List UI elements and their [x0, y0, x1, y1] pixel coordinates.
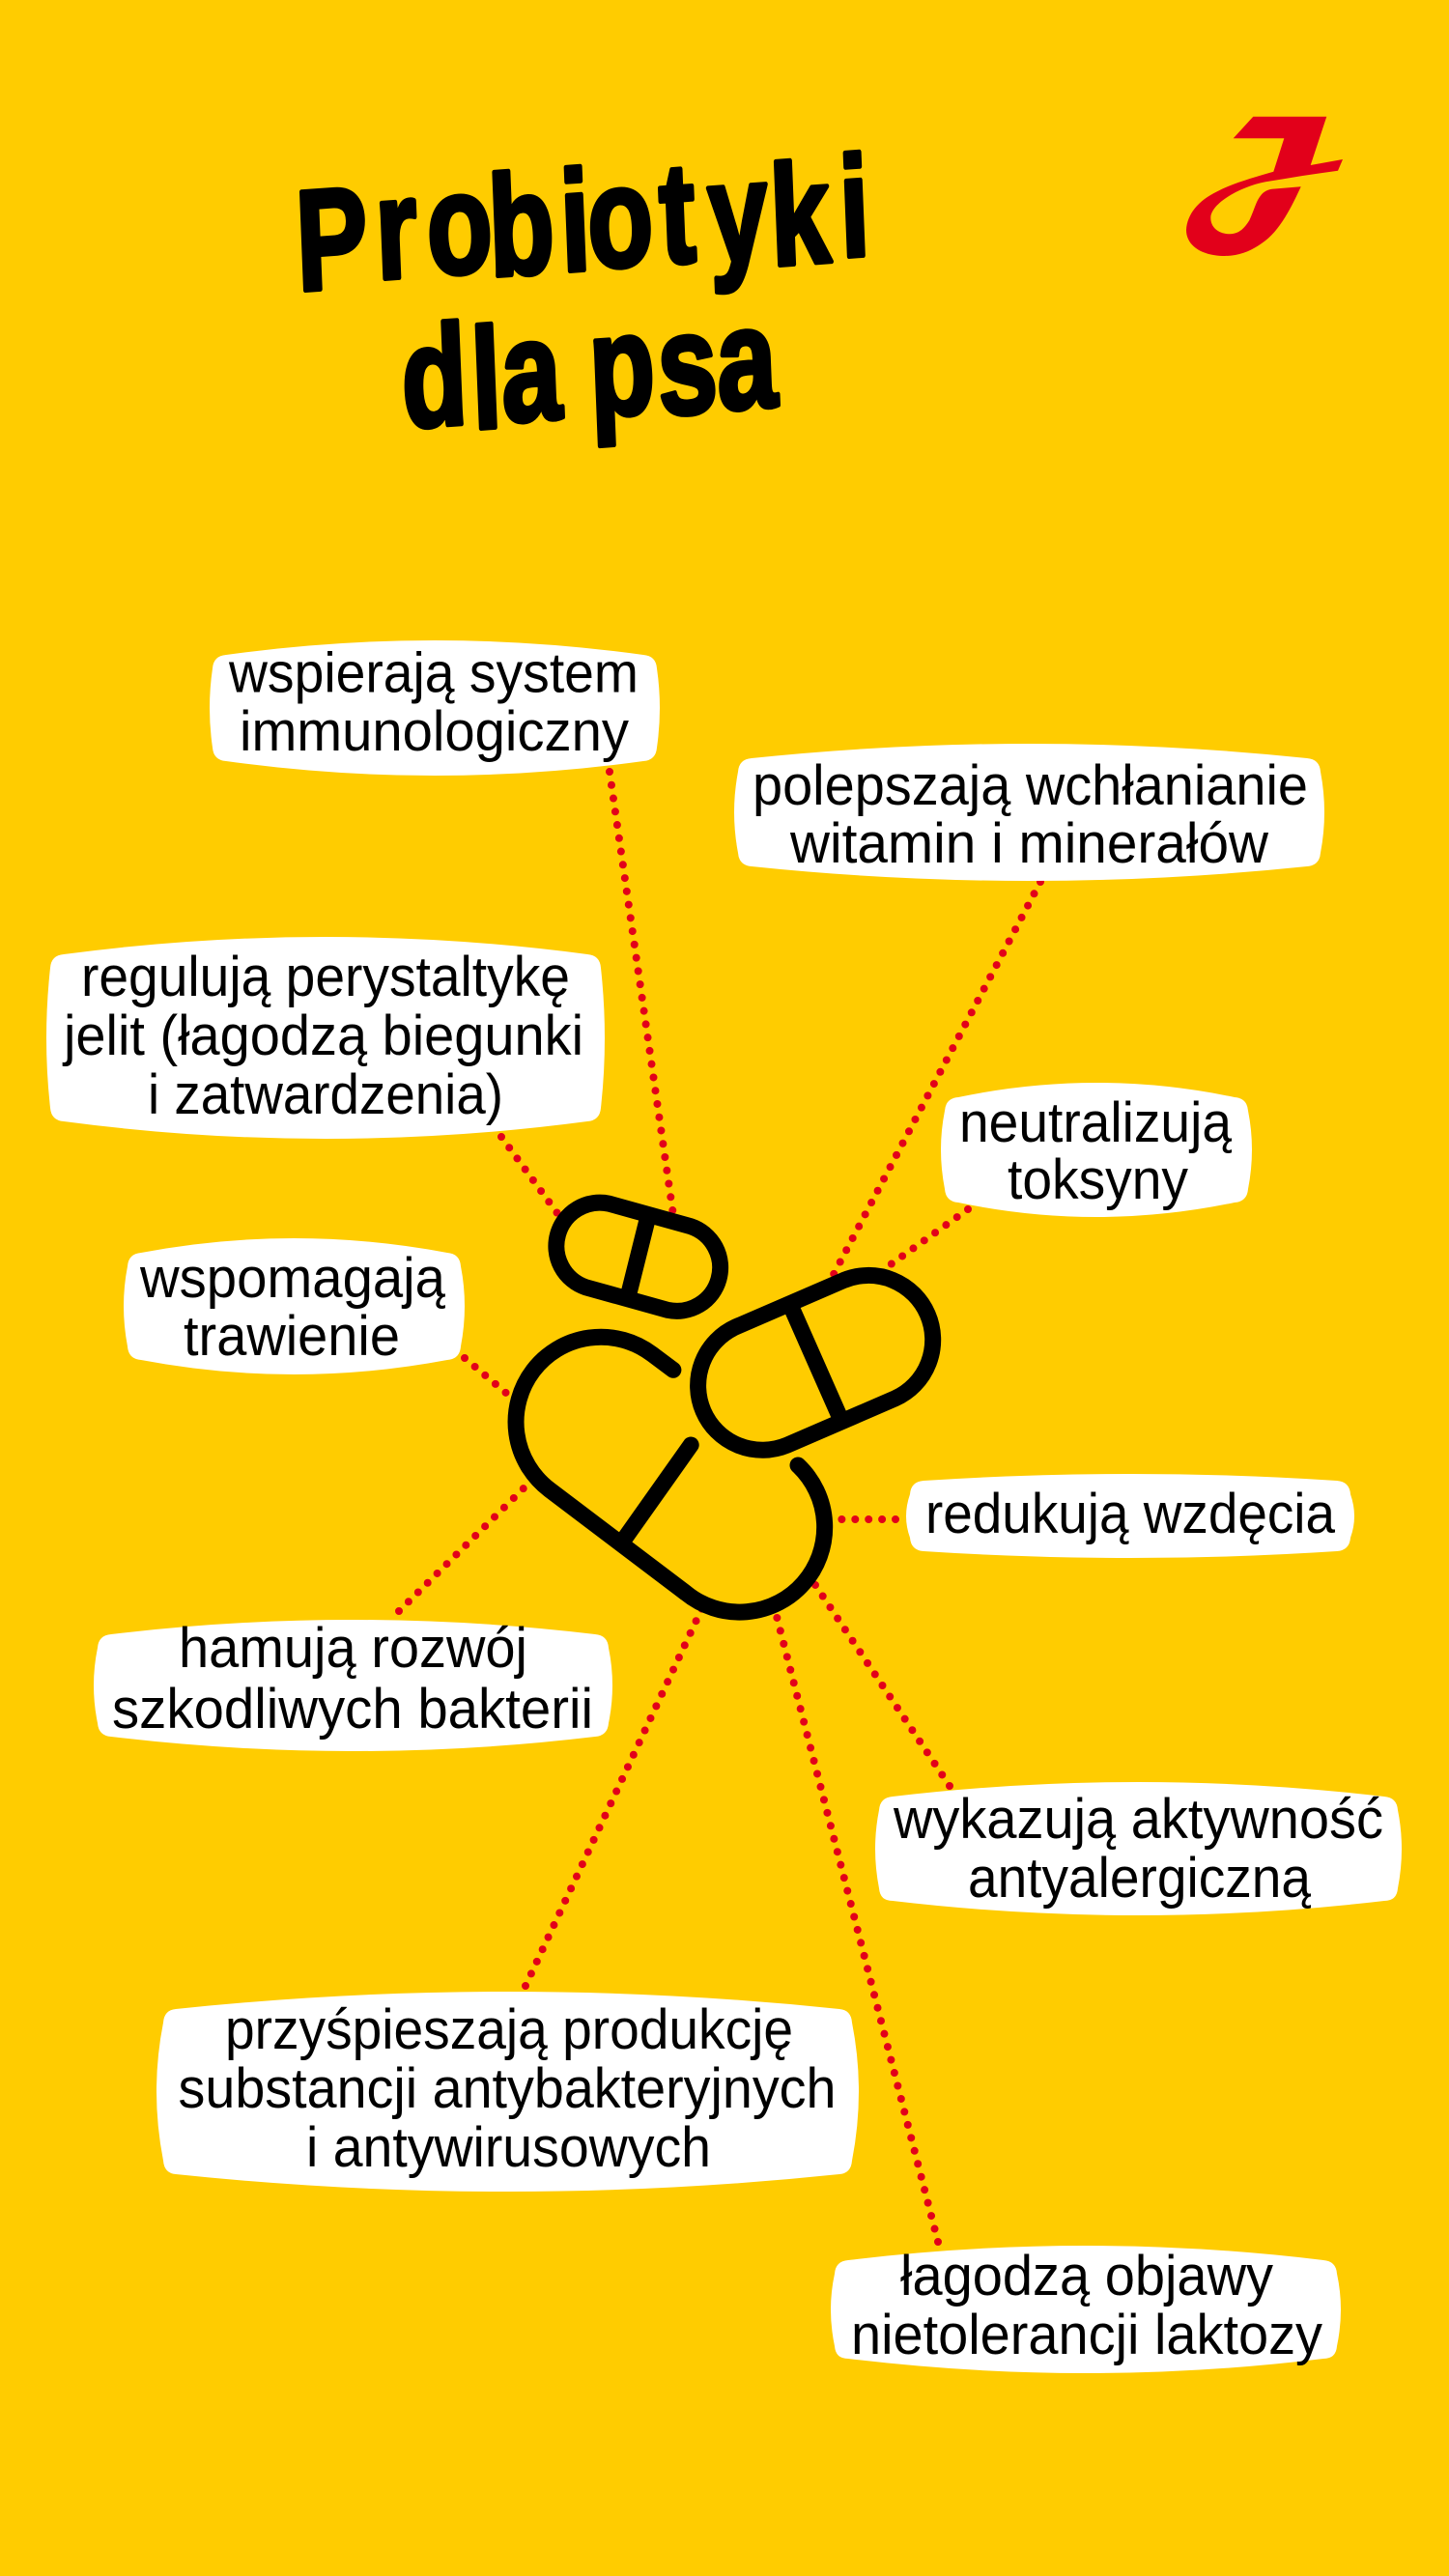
callout: hamują rozwój szkodliwych bakterii: szkodliwych bakterii: [112, 1678, 593, 1741]
callout: łagodzą objawy nietolerancji laktozy: nietolerancji laktozy: [851, 2304, 1322, 2366]
callout: wykazują aktywność antyalergiczną: antyalergiczną: [968, 1847, 1312, 1910]
icon: three pills: [516, 1203, 933, 1612]
connector: digestion: [465, 1358, 514, 1400]
connector: antibacterial substances: [526, 1601, 705, 1986]
callout: łagodzą objawy nietolerancji laktozy: [831, 2245, 1341, 2373]
large open pill: [516, 1337, 825, 1612]
callout: wspomagają trawienie: wspomagają: [139, 1247, 446, 1310]
callout: neutralizują toksyny: [941, 1083, 1252, 1217]
callout: łagodzą objawy nietolerancji laktozy: łagodzą objawy: [900, 2245, 1273, 2307]
callout: wspierają system immunologiczny: wspierają system: [228, 641, 639, 705]
callout: wspomagają trawienie: [124, 1238, 465, 1374]
callout: neutralizują toksyny: neutralizują: [959, 1091, 1233, 1154]
callout: hamują rozwój szkodliwych bakterii: hamują rozwój: [179, 1617, 527, 1680]
title: [293, 127, 872, 460]
callout: hamują rozwój szkodliwych bakterii: [94, 1617, 612, 1751]
callout: wykazują aktywność antyalergiczną: wykazują aktywność: [893, 1788, 1383, 1851]
callout: przyśpieszają produkcję substancji: substancji antybakteryjnych: [178, 2057, 837, 2120]
callout: regulują perystaltykę jelit: i zatwardzenia): [148, 1063, 503, 1126]
callout: wspierają system immunologiczny: [210, 640, 660, 776]
title: Probiotyki: [293, 127, 872, 322]
callout: polepszają wchłanianie witamin i minerałów: [734, 744, 1324, 881]
connector: antiallergic: [810, 1576, 950, 1786]
callout: regulują perystaltykę jelit: jelit (łagodzą biegunki: [62, 1005, 583, 1067]
connector: vitamin absorption: [831, 882, 1040, 1280]
callout: wspierają system immunologiczny: immunologiczny: [240, 700, 629, 763]
callout: przyśpieszają produkcję substancji: [156, 1992, 859, 2192]
callout: przyśpieszają produkcję substancji: przyśpieszają produkcję: [225, 1998, 793, 2061]
callout: polepszają wchłanianie witamin i minerałów: polepszają wchłanianie: [753, 754, 1308, 817]
small pill: [556, 1203, 721, 1311]
callout: wspomagają trawienie: trawienie: [184, 1305, 400, 1368]
connector: harmful bacteria: [399, 1483, 529, 1611]
callout: regulują perystaltykę jelit: regulują perystaltykę: [81, 946, 570, 1008]
icon: red logo: [1186, 117, 1343, 256]
callout: wykazują aktywność antyalergiczną: [875, 1782, 1402, 1915]
connector: toxins: [887, 1209, 968, 1267]
connector: peristalsis: [501, 1137, 562, 1220]
connector: bloating: [837, 1515, 895, 1523]
medium pill: [698, 1275, 933, 1450]
callout: regulują perystaltykę jelit: [46, 937, 605, 1139]
dotted connectors: [399, 772, 1040, 2242]
callout: przyśpieszają produkcję substancji: i antywirusowych: [306, 2116, 711, 2179]
connector: lactose: [773, 1601, 938, 2242]
connector: immune system: [610, 772, 673, 1215]
callout: polepszają wchłanianie witamin i minerałów: witamin i minerałów: [789, 812, 1269, 875]
callout: redukują wzdęcia: redukują wzdęcia: [925, 1483, 1336, 1545]
callout: neutralizują toksyny: toksyny: [1008, 1148, 1188, 1211]
title: dla psa: [398, 277, 781, 460]
